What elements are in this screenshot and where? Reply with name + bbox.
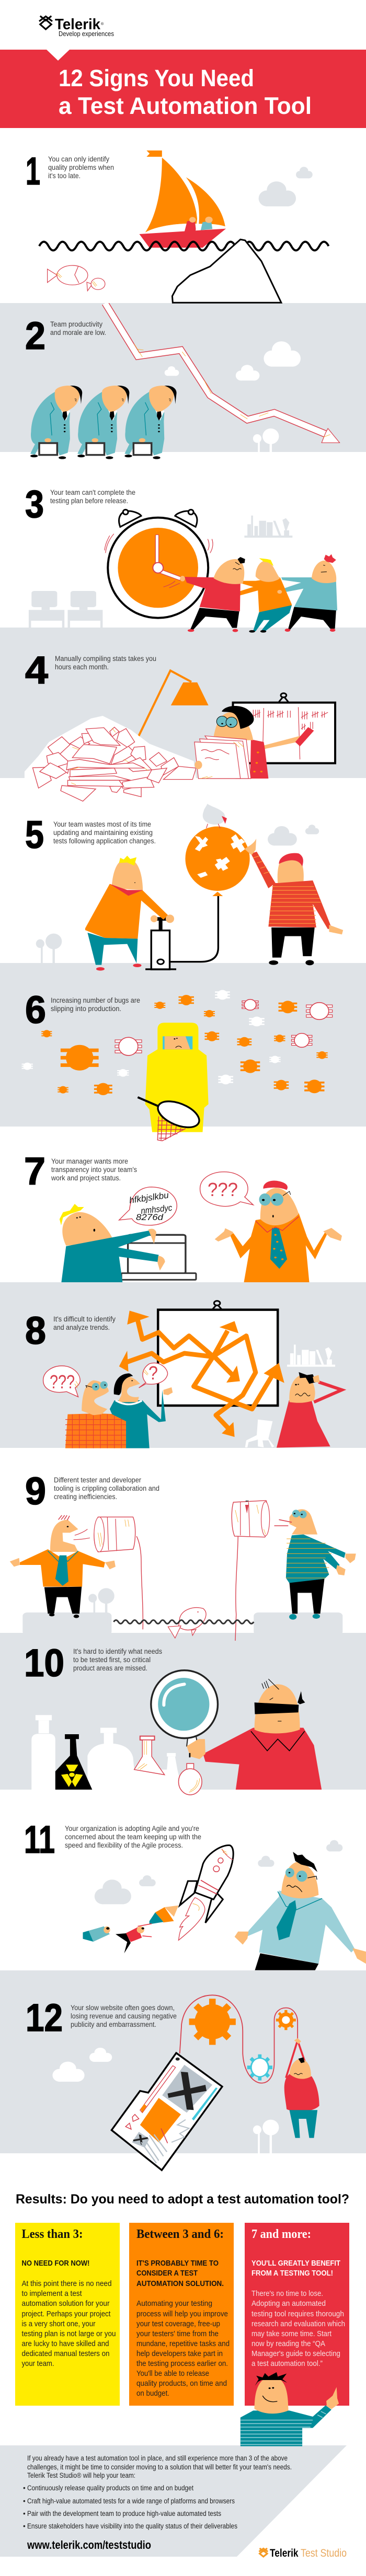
pointing man over panel: [241, 2372, 339, 2446]
illustration 12: website hanging from gears: [111, 1995, 319, 2170]
title banner: a Test Automation Tool: [59, 92, 312, 119]
illustration 1: sailboat and iceberg: [39, 150, 329, 303]
panel: between 3 and 6: Automating your testing: [136, 2300, 212, 2308]
logo: Telerik Test Studio: Telerik: [270, 2547, 299, 2559]
hanging man: [284, 2038, 319, 2138]
sign 5: updating and maintaining existing: [53, 829, 153, 837]
results heading: Results: Do you need to adopt a test automation tool?: [16, 2192, 349, 2207]
illustration 12: clouds and trees: [52, 2048, 279, 2156]
panel: 7 and more: YOU'LL GREATLY BENEFIT: [251, 2259, 340, 2268]
closing text block: Continuously release quality products on time and on budget: [27, 2484, 193, 2492]
blindfolded man: [187, 1679, 322, 1790]
band: sign 2 background: [0, 303, 366, 452]
illustration 10: lab flasks: [31, 1670, 322, 1795]
panel: 7 and more: a test automation tool.”: [251, 2360, 323, 2368]
sign 9: [25, 1469, 159, 1513]
team member in teal: [278, 554, 337, 632]
left can: [94, 1517, 135, 1552]
title banner: [0, 50, 366, 128]
sign 4: Manually compiling stats takes you: [55, 655, 156, 663]
sign 12: Your slow website often goes down,: [71, 2004, 175, 2012]
illustration 6: bugs: [22, 990, 333, 1095]
sign 11: 11: [24, 1818, 55, 1861]
sign 7: 7: [24, 1150, 45, 1193]
panel: between 3 and 6: AUTOMATION SOLUTION.: [136, 2279, 224, 2288]
url: www.telerik.com/teststudio: [27, 2538, 151, 2551]
man pumping: [85, 856, 174, 971]
grey chair: [245, 1420, 274, 1447]
sign 8: [25, 1309, 116, 1352]
sign 2: and morale are low.: [50, 329, 106, 336]
illustration 9: tin can telephone: [10, 1501, 356, 1641]
panel: 7 and more: 7 and more:: [251, 2227, 311, 2241]
sign 9: tooling is crippling collaboration and: [54, 1484, 159, 1492]
panel: less than 3: [15, 2223, 120, 2406]
closing text block: •: [23, 2497, 26, 2505]
illustration 7: manager with question marks: [200, 1172, 342, 1282]
man with check shirt: [65, 1380, 126, 1448]
sign 6: [25, 988, 140, 1031]
title banner: 12 Signs You Need: [59, 65, 254, 91]
band: sign 6 background: [0, 963, 366, 1127]
illustration 8: chart with tangled arrows: [43, 1301, 342, 1448]
panel: 7 and more: FROM A TESTING TOOL!: [251, 2269, 333, 2278]
speech bubble text: gibberish: [129, 1190, 173, 1222]
sign 6: Increasing number of bugs are: [51, 996, 140, 1004]
thrown figure in teal: [83, 1927, 110, 1942]
panel: between 3 and 6: quality products, on time and: [136, 2380, 227, 2388]
woman: [110, 1373, 173, 1448]
logo: Telerik Test Studio: Test Studio: [301, 2547, 347, 2559]
sign 6: 6: [25, 988, 46, 1031]
panel: 7 and more: There's no time to lose.: [251, 2290, 323, 2298]
logo: Telerik header: ®: [101, 22, 104, 26]
sign 3: [25, 482, 135, 526]
sign 5: tests following application changes.: [53, 837, 156, 845]
illustration 11: rocket, thrown team and worried manager: [83, 1840, 366, 1970]
worried manager: [235, 1852, 366, 1970]
panel: 7 and more: Manager's guide to selecting: [251, 2350, 340, 2358]
band: sign 4 background: [0, 628, 366, 778]
panel: between 3 and 6: your test coverage, free-up: [136, 2320, 220, 2328]
illustration 7: man at laptop: [60, 1187, 196, 1282]
sign 3: testing plan before release.: [50, 497, 128, 505]
panel: less than 3: testing plan is not large or you: [22, 2330, 116, 2338]
question marks: sign 8: ???: [50, 1371, 75, 1393]
illustration 5: clouds and bird on balloon: [185, 804, 319, 891]
closing text block: •: [23, 2522, 26, 2530]
sign 2: 2: [25, 314, 45, 357]
question marks: sign 7: ???: [208, 1179, 238, 1200]
sign 2: [25, 314, 106, 357]
question mark: woman: ?: [148, 1362, 158, 1384]
closing text block: •: [23, 2484, 26, 2492]
sign 12: losing revenue and causing negative: [71, 2012, 177, 2020]
panel: less than 3: are lucky to have skilled and: [22, 2340, 109, 2348]
sign 10: [24, 1641, 162, 1685]
sign 7: work and project status.: [51, 1174, 121, 1182]
sign 4: 4: [25, 648, 48, 692]
panel: between 3 and 6: help developers take part in: [136, 2350, 223, 2358]
sign 9: Different tester and developer: [54, 1476, 141, 1484]
panel: less than 3: dedicated manual testers on: [22, 2350, 110, 2358]
speech bubble text: gibberish: hfkbjslkbu: [129, 1190, 169, 1205]
panel: less than 3: automation solution for your: [22, 2300, 110, 2308]
panel: between 3 and 6: IT'S PROBABLY TIME TO: [136, 2259, 219, 2268]
closing text block: challenges, it might be time to consider moving to a solution that will better fit your team's needs.: [27, 2463, 292, 2471]
sign 3: Your team can't complete the: [50, 489, 135, 496]
sign 8: 8: [25, 1309, 46, 1352]
man in striped shirt: [245, 839, 343, 965]
clouds and trees: sign 2: [165, 341, 301, 465]
closing text block: Craft high-value automated tests for a wide range of platforms and browsers: [27, 2497, 235, 2505]
sign 4: hours each month.: [55, 663, 109, 671]
panel: less than 3: is a very short one, your: [22, 2320, 96, 2328]
speech bubble text: gibberish: nmhsdyc: [140, 1203, 173, 1216]
illustration 2: three dejected men: [30, 386, 177, 459]
panel: less than 3: project. Perhaps your project: [22, 2310, 111, 2318]
panel: 7 and more: may take some time. Start: [251, 2330, 331, 2338]
panel: 7 and more: Adopting an automated: [251, 2300, 326, 2308]
sign 11: Your organization is adopting Agile and you're: [65, 1825, 199, 1832]
illustration 1: fish: [48, 265, 105, 291]
sign 1: [26, 149, 114, 193]
sign 8: It's difficult to identify: [53, 1315, 116, 1323]
man scratching head: [277, 1372, 342, 1448]
right man: [274, 1509, 356, 1620]
device: [111, 2053, 222, 2170]
closing text block: If you already have a test automation tool in place, and still experience more than 3 of the above: [27, 2454, 288, 2462]
illustration 3: clock with team pulling the hand: [29, 509, 337, 633]
sign 1: quality problems when: [48, 164, 114, 171]
sign 5: 5: [25, 813, 44, 856]
closing text block: Ensure stakeholders have visibility into the quality status of their deliverables: [27, 2522, 237, 2530]
thrown figure in orange: [150, 1906, 178, 1924]
panel: between 3 and 6: mundane, repetitive tasks and: [136, 2340, 230, 2348]
sign 4: [25, 648, 156, 692]
panel: less than 3: to implement a test: [22, 2290, 82, 2298]
sign 6: slipping into production.: [51, 1005, 121, 1013]
sign 7: Your manager wants more: [51, 1157, 128, 1165]
sign 12: 12: [26, 1996, 63, 2039]
sign 11: concerned about the team keeping up with the: [65, 1833, 201, 1841]
speech bubble text: gibberish: 8276d: [136, 1212, 164, 1222]
illustration 6: hazmat suit and net: [138, 1023, 209, 1141]
panel: between 3 and 6: Between 3 and 6:: [136, 2227, 224, 2241]
sign 12: [26, 1996, 177, 2039]
sign 9: 9: [25, 1469, 46, 1513]
panel: between 3 and 6: CONSIDER A TEST: [136, 2269, 198, 2278]
rocket: [178, 1846, 233, 1940]
sign 10: 10: [24, 1641, 64, 1685]
sign 12: publicity and embarrassment.: [71, 2021, 156, 2028]
thrown figure in red: [116, 1924, 152, 1953]
sign 5: [25, 813, 156, 856]
sign 5: Your team wastes most of its time: [53, 820, 151, 828]
panel: 7 and more: research and evaluation which: [251, 2320, 345, 2328]
panel: 7 and more: testing tool requires thorough: [251, 2310, 344, 2318]
panel: between 3 and 6: process will help you improve: [136, 2310, 228, 2318]
sign 8: and analyze trends.: [53, 1324, 110, 1331]
panel: 7 and more: now by reading the “QA: [251, 2340, 325, 2348]
logo: Telerik header: Develop experiences: [59, 30, 114, 38]
sign 3: 3: [25, 482, 44, 526]
panel: between 3 and 6: You'll be able to release: [136, 2370, 209, 2378]
sign 1: it's too late.: [48, 172, 81, 180]
left man: [10, 1515, 116, 1618]
sign 9: creating inefficiencies.: [54, 1493, 117, 1501]
closing text block: Pair with the development team to produce high-value automated tests: [27, 2510, 221, 2517]
panel: less than 3: Less than 3:: [22, 2227, 83, 2241]
panel: between 3 and 6: the testing process earlier on.: [136, 2360, 228, 2368]
panel: between 3 and 6: your testers' time from the: [136, 2330, 219, 2338]
sign 1: 1: [26, 149, 40, 193]
sign 10: It's hard to identify what needs: [73, 1647, 162, 1655]
panel: less than 3: your team.: [22, 2360, 54, 2368]
panel: closing background: [0, 2445, 347, 2557]
conical flask: [134, 1736, 165, 1775]
logo: Telerik header: [39, 16, 114, 38]
panel: between 3 and 6: on budget.: [136, 2389, 169, 2398]
sign 7: transparency into your team's: [51, 1166, 137, 1174]
panel: less than 3: At this point there is no need: [22, 2280, 112, 2288]
team member in red: [180, 557, 245, 632]
logo: Telerik Test Studio: [259, 2547, 347, 2559]
illustration 4: woman at tally board: [195, 693, 335, 779]
panel: less than 3: NO NEED FOR NOW!: [22, 2259, 90, 2268]
sign 10: to be tested first, so critical: [73, 1656, 151, 1664]
closing text block: Telerik Test Studio® will help your team:: [27, 2471, 135, 2479]
sign 7: [24, 1150, 137, 1193]
panel: 7 and more: [245, 2223, 349, 2406]
fish jumping: [168, 1608, 206, 1638]
illustration 5: men with pump and patched balloon: [36, 839, 343, 971]
sign 11: speed and flexibility of the Agile process.: [65, 1841, 183, 1849]
band: sign 10 background: [0, 1633, 366, 1790]
sign 2: Team productivity: [50, 320, 102, 328]
magnifier: [151, 1670, 218, 1746]
band: sign 12 background: [0, 1970, 366, 2153]
team member in orange: [228, 558, 292, 633]
round flask: [178, 1763, 202, 1795]
sign 10: product areas are missed.: [73, 1664, 147, 1672]
sign 11: [24, 1818, 201, 1861]
logo: Telerik header: Telerik: [55, 16, 101, 33]
band: sign 8 background: [0, 1282, 366, 1448]
closing text block: •: [23, 2510, 26, 2517]
closing text block: [23, 2454, 292, 2530]
right can: [232, 1501, 270, 1537]
panel: between 3 and 6: [129, 2223, 234, 2406]
illustration 4: paper pile and lamp: [25, 670, 209, 801]
illustration 2: falling arrow: [98, 296, 340, 443]
hazard symbol: [61, 1765, 83, 1787]
sign 1: You can only identify: [48, 155, 109, 163]
